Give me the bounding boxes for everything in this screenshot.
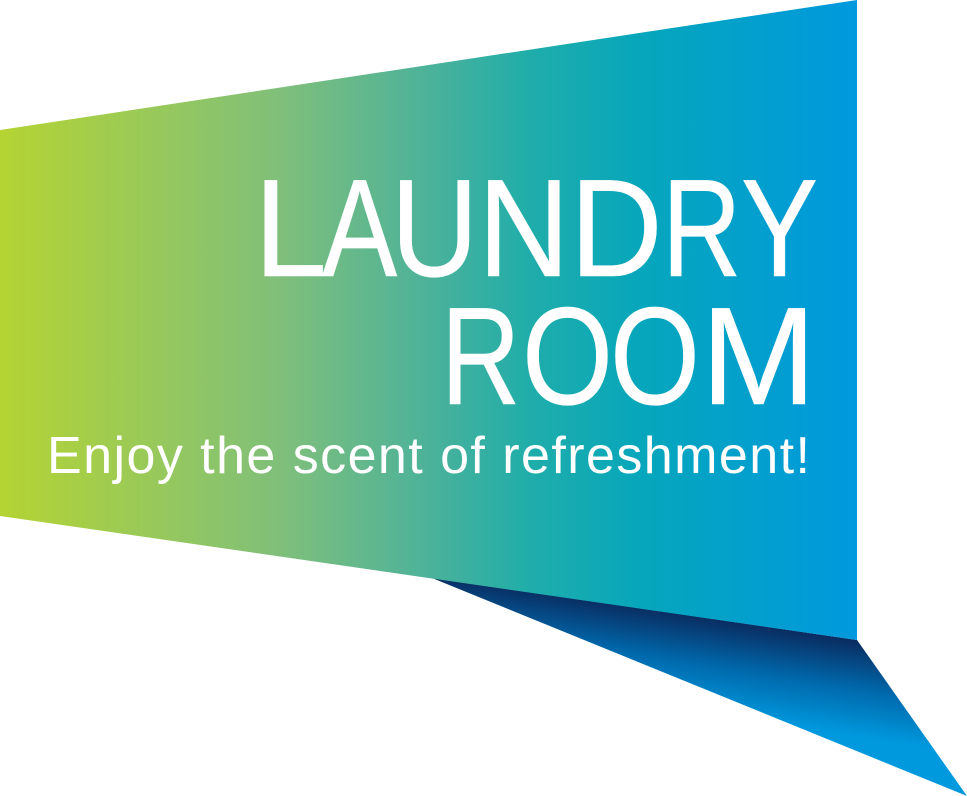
title line 1: L [254,151,327,306]
banner panel [0,0,857,640]
title line 2 [441,279,816,434]
subtitle: Enjoy the scent of refreshment! [47,427,810,485]
title line 1: Y [740,151,818,306]
title line 2: O [522,279,613,434]
title line 2: O [610,279,700,434]
title line 1: U [391,151,478,306]
title line 1: N [478,151,570,306]
title line 1: D [570,151,663,306]
title line 2: M [700,279,816,434]
title line 1: R [662,151,742,306]
title line 1 [254,151,818,306]
banner fold shadow [432,578,967,796]
title line 1: A [322,151,397,306]
title line 2: R [441,279,520,434]
